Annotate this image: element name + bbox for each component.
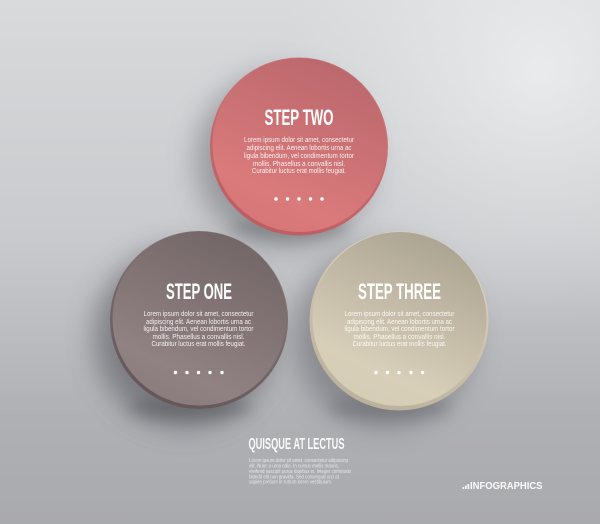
circle rim [210, 58, 388, 236]
body text: mollis. Phasellus a convallis nisl. [152, 334, 245, 341]
panel: step two circle [210, 58, 388, 236]
footer text block: blandit elit non gravida. Sed consequat orci at [249, 474, 339, 480]
circle rim [310, 232, 488, 410]
heading: step two: STEP TWO [264, 105, 334, 130]
logo: infographics [462, 480, 542, 492]
footer text block: eleifend suscipit purus dapibus in. Integer commodo [249, 469, 351, 475]
panel: step three circle [310, 232, 488, 410]
logo wordmark: INFOGRAPHICS [470, 480, 542, 492]
circle face [212, 58, 386, 232]
panel: step one circle [110, 231, 288, 409]
body text: mollis. Phasellus a convallis nisl. [354, 334, 446, 341]
icon: bar chart [462, 484, 469, 489]
body text: Curabitur luctus erat mollis feugiat. [352, 341, 447, 348]
circle rim [110, 231, 288, 409]
pagination dots [174, 371, 224, 374]
body text: ligula bibendum, vel condimentum tortor [344, 326, 455, 333]
footer text block: elit. Nunc a urna odio. In cursus mollis mauris, [249, 464, 339, 470]
body text: Lorem ipsum dolor sit amet, consectetur [344, 311, 455, 318]
body text: mollis. Phasellus a convallis nisl. [253, 161, 345, 168]
circle face [112, 232, 286, 406]
pagination dots [374, 371, 424, 374]
body text [144, 311, 254, 348]
heading: step three: STEP THREE [358, 279, 441, 304]
circle shadows [94, 72, 474, 427]
body text: Curabitur luctus erat mollis feugiat. [152, 341, 246, 348]
heading: step one: STEP ONE [166, 279, 232, 304]
body text: ligula bibendum, vel condimentum tortor [244, 153, 355, 160]
heading: quisque at lectus: QUISQUE AT LECTUS [248, 436, 345, 453]
footer text block: sapien pretium in rutrum lorem vestibulum. [249, 480, 332, 486]
pagination dots [274, 197, 324, 201]
body text [244, 137, 355, 175]
body text: Curabitur luctus erat mollis feugiat. [252, 168, 346, 175]
footer text block: Lorem ipsum dolor sit amet, consectetur adipiscing [249, 458, 348, 464]
body text: adipiscing elit. Aenean lobortis urna ac [146, 319, 251, 326]
circle face [312, 232, 486, 406]
body text [344, 311, 455, 348]
body text: Lorem ipsum dolor sit amet, consectetur [244, 137, 355, 144]
body text: adipiscing elit. Aenean lobortis urna ac [347, 319, 452, 326]
footer text block [249, 458, 351, 486]
body text: ligula bibendum, vel condimentum tortor [144, 326, 254, 333]
body text: adipiscing elit. Aenean lobortis urna ac [246, 145, 352, 152]
body text: Lorem ipsum dolor sit amet, consectetur [144, 311, 254, 318]
